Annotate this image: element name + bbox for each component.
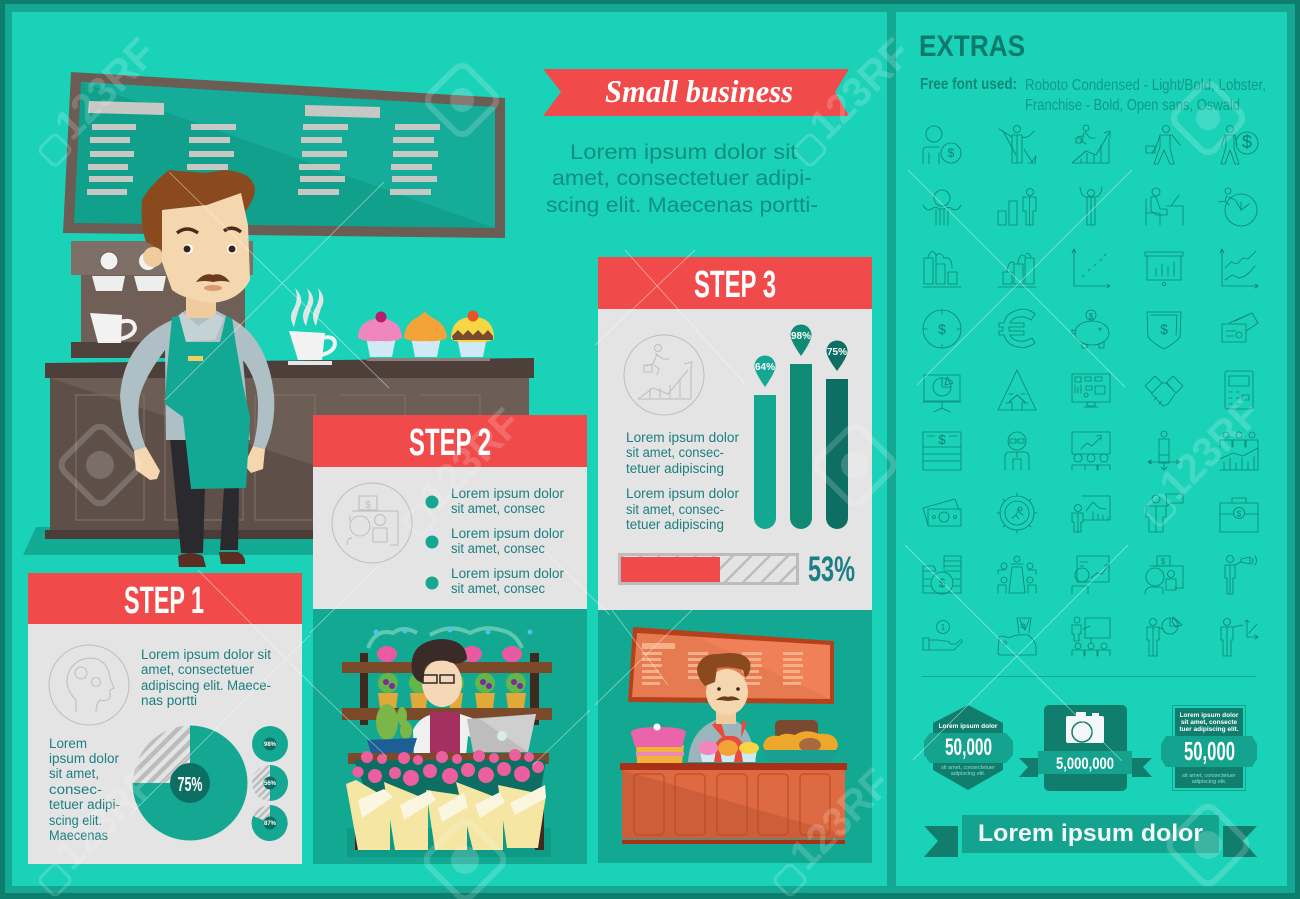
step 1 side text: scing elit. <box>49 813 102 828</box>
step 2 list: Lorem ipsum dolor <box>451 566 565 581</box>
bar chart <box>754 324 848 529</box>
small pie charts <box>252 726 288 841</box>
shirt and arms <box>120 310 274 452</box>
small muffins <box>698 740 759 762</box>
icon: head with glasses <box>1005 432 1029 470</box>
icon: dashboard monitor <box>1072 374 1110 407</box>
icon: coin stacks: $ <box>939 576 946 590</box>
step 2 list: Lorem ipsum dolor <box>451 486 565 501</box>
bakery menu board <box>628 627 834 704</box>
text: 123RF <box>1150 389 1270 508</box>
panel: extras heading: Free font used: <box>920 76 1017 93</box>
step 1 text: adipiscing elit. Maece- <box>141 678 271 693</box>
bar chart: 64% <box>755 362 775 373</box>
icon set <box>923 125 1258 656</box>
icon: head with gears <box>49 645 129 725</box>
step 3 text: tetuer adipiscing <box>626 517 724 532</box>
icon: businessman with coin: $ <box>948 146 955 160</box>
icon: hand with coin <box>923 620 962 650</box>
title ribbon: Small business <box>605 73 793 109</box>
ribbon banner <box>924 815 1257 857</box>
menu board <box>63 72 505 238</box>
text: 123RF <box>410 399 530 518</box>
step 2 list: sit amet, consec <box>451 541 545 556</box>
icon: coin stacks <box>923 556 961 594</box>
small pie charts: 87% <box>264 821 277 827</box>
icon: man with megaphone <box>1225 556 1256 594</box>
icon: bars and person <box>998 188 1036 225</box>
icon: falling chart man <box>999 126 1036 163</box>
laptop <box>467 714 536 752</box>
badge: square 50,000: sit amet, consecte <box>1181 719 1238 726</box>
badge: camera 5,000,000 <box>1019 705 1152 791</box>
icon: dollar clock <box>923 310 961 348</box>
icon: handshake <box>1145 376 1183 406</box>
panel: step 2 <box>313 415 587 864</box>
step 1 side text: Maecenas <box>49 828 108 843</box>
icon: scatter plot <box>1072 249 1110 288</box>
step 2 list <box>426 486 565 596</box>
icon: balancing person <box>923 190 961 225</box>
step 3 text: Lorem ipsum dolor <box>626 486 740 501</box>
bread plate <box>763 720 838 762</box>
icon: piggy bank <box>1072 310 1109 348</box>
icon: classroom board <box>1072 617 1110 656</box>
bouquet wraps <box>346 780 546 850</box>
icon: piggy bank: $ <box>1089 312 1094 321</box>
small pie charts: 98% <box>264 742 277 748</box>
badge: hexagon 50,000: adipiscing elit. <box>951 771 986 777</box>
step 2 list: Lorem ipsum dolor <box>451 526 565 541</box>
badge: hexagon 50,000: Lorem ipsum dolor <box>939 723 998 730</box>
icon: walking businessman <box>1146 126 1180 164</box>
intro text: scing elit. Maecenas portti- <box>546 194 818 217</box>
badge: hexagon 50,000 <box>924 705 1013 790</box>
badge: camera 5,000,000: 5,000,000 <box>1056 754 1114 773</box>
step 3 text: sit amet, consec- <box>626 502 724 517</box>
icon: line graph <box>1220 249 1258 288</box>
eyes and brows <box>183 244 193 254</box>
panel: step 2: STEP 2 <box>409 422 491 464</box>
step 1 side text: ipsum dolor <box>49 751 120 766</box>
icon: mountain arrow <box>998 370 1036 410</box>
icon: runner on rising chart <box>1072 125 1110 163</box>
title ribbon <box>543 69 849 116</box>
step 2 list: sit amet, consec <box>451 501 545 516</box>
icon: person at desk <box>1146 188 1183 225</box>
step 3 text <box>626 430 740 532</box>
icon: person with direction arrows <box>1148 431 1180 470</box>
pie chart 75% <box>132 726 248 840</box>
badge: hexagon 50,000: sit amet, consectetuer <box>941 765 995 771</box>
step 1 text: Lorem ipsum dolor sit <box>141 647 271 662</box>
icon: dollar clock: $ <box>938 321 946 337</box>
icon: rising bars <box>998 253 1036 287</box>
icon: audience with chart <box>1072 432 1110 470</box>
bar chart: 98% <box>791 331 811 342</box>
panel: step 3: STEP 3 <box>694 264 776 306</box>
badge: square 50,000: 50,000 <box>1184 736 1235 766</box>
illustration: bakery <box>620 627 847 844</box>
badge: hexagon 50,000: 50,000 <box>945 734 992 761</box>
icon: shield with dollar <box>1147 312 1181 349</box>
florist <box>412 639 492 756</box>
counter <box>45 358 534 539</box>
icon: meeting table <box>998 556 1036 593</box>
apron <box>165 316 250 489</box>
coffee cup with steam <box>288 288 335 365</box>
panel: extras heading: EXTRAS <box>919 30 1025 63</box>
bar chart: 75% <box>827 347 847 358</box>
icon: dollar briefcase: $ <box>1237 510 1242 518</box>
hands <box>134 446 265 480</box>
badge: square 50,000 <box>1161 706 1257 790</box>
icon: consultation <box>1145 556 1183 594</box>
intro text: amet, consectetuer adipi- <box>552 167 812 190</box>
icon: consultation: $ <box>1161 557 1166 566</box>
divider <box>922 676 1256 677</box>
icon: hand with coin: 1 <box>941 623 946 632</box>
text: 123RF <box>45 29 165 148</box>
legs <box>170 438 240 553</box>
icon: presenter with pie chart <box>1147 617 1182 656</box>
icon: pie chart on easel <box>923 375 961 412</box>
icon: presenter with line chart <box>1221 618 1258 656</box>
step 1 text: amet, consectetuer <box>141 662 254 677</box>
intro text <box>546 141 818 217</box>
ribbon banner: Lorem ipsum dolor <box>978 820 1203 847</box>
icon: meeting with money: $ <box>365 500 371 511</box>
icon: falling bars <box>923 251 961 287</box>
icon: gear with runner <box>997 493 1037 533</box>
panel: extras heading <box>919 30 1266 114</box>
icon: walking man with dollar gear: $ <box>1242 132 1252 152</box>
icon: banknote stack <box>923 432 961 470</box>
icon: banknote stack: $ <box>938 432 946 447</box>
text: 123RF <box>780 759 900 878</box>
intro text: Lorem ipsum dolor sit <box>570 141 797 164</box>
icon: speaker with speech bubble <box>1146 494 1183 532</box>
badge: square 50,000: tuer adipiscing elit. <box>1179 726 1239 733</box>
illustration: coffee shop barista <box>23 72 534 567</box>
text: 123RF <box>45 759 165 878</box>
badge: square 50,000: sit amet, consectetuer <box>1182 773 1236 779</box>
step 1 side text: tetuer adipi- <box>49 797 120 812</box>
step 1 side text: Lorem <box>49 736 87 751</box>
face <box>162 193 250 303</box>
badge: square 50,000: adipiscing elit. <box>1192 779 1227 785</box>
step 3 text: tetuer adipiscing <box>626 461 724 476</box>
progress bar 53%: 53% <box>808 550 855 589</box>
shelves <box>342 628 552 725</box>
text: 123RF <box>800 29 920 148</box>
icon: credit cards <box>1222 313 1258 342</box>
icon: dollar briefcase <box>1220 498 1258 532</box>
cactus <box>367 704 417 756</box>
step 1 side text: consec- <box>49 782 102 797</box>
icon: meeting with money <box>332 483 412 563</box>
icon: manager with chart <box>1072 556 1109 594</box>
step 1 side text: sit amet, <box>49 766 99 781</box>
icon: team and bar chart <box>1220 432 1258 470</box>
step 2 list: sit amet, consec <box>451 581 545 596</box>
counter and roses <box>348 749 549 850</box>
step 3 text: Lorem ipsum dolor <box>626 430 740 445</box>
icon: pile of money in hand <box>998 618 1036 655</box>
baker <box>688 653 756 762</box>
cake <box>631 724 686 763</box>
icon: shield with dollar: $ <box>1160 321 1168 337</box>
illustration: flower shop <box>342 628 552 857</box>
icon: businessman with coin <box>923 126 961 164</box>
floor shadow <box>23 527 313 555</box>
panel: step 1 <box>28 573 302 864</box>
bakery counter <box>620 763 847 844</box>
panel: step 3 <box>598 257 872 863</box>
icon: presenter at falling chart <box>1072 496 1110 532</box>
espresso machine <box>71 241 253 358</box>
hair <box>142 170 255 250</box>
step 3 text: sit amet, consec- <box>626 445 724 460</box>
step 1 text: nas portti <box>141 693 197 708</box>
small pie charts: 56% <box>264 781 277 787</box>
ear <box>143 247 163 267</box>
icon: calculator <box>1225 371 1253 409</box>
pie chart 75%: 75% <box>178 774 203 796</box>
icon: camera <box>1066 712 1104 743</box>
icon: running up the chart <box>624 335 704 415</box>
panel: step 1: STEP 1 <box>124 580 204 622</box>
muffins <box>358 310 494 361</box>
panel: extras heading: Franchise - Bold, Open sans, Oswald <box>1025 97 1240 114</box>
icon: presentation board <box>1145 252 1183 286</box>
icon: walking man with dollar gear <box>1221 126 1258 164</box>
badge: square 50,000: Lorem ipsum dolor <box>1180 712 1239 719</box>
step 1 side text <box>49 736 120 843</box>
neck <box>186 292 216 318</box>
barista <box>120 170 274 567</box>
icon: person running by clock <box>1219 188 1257 226</box>
step 1 text <box>141 647 271 708</box>
progress bar 53% <box>620 550 855 589</box>
icon: arms raised person <box>1080 187 1102 225</box>
icon: money banknotes <box>923 499 961 526</box>
icon: euro <box>999 309 1035 348</box>
